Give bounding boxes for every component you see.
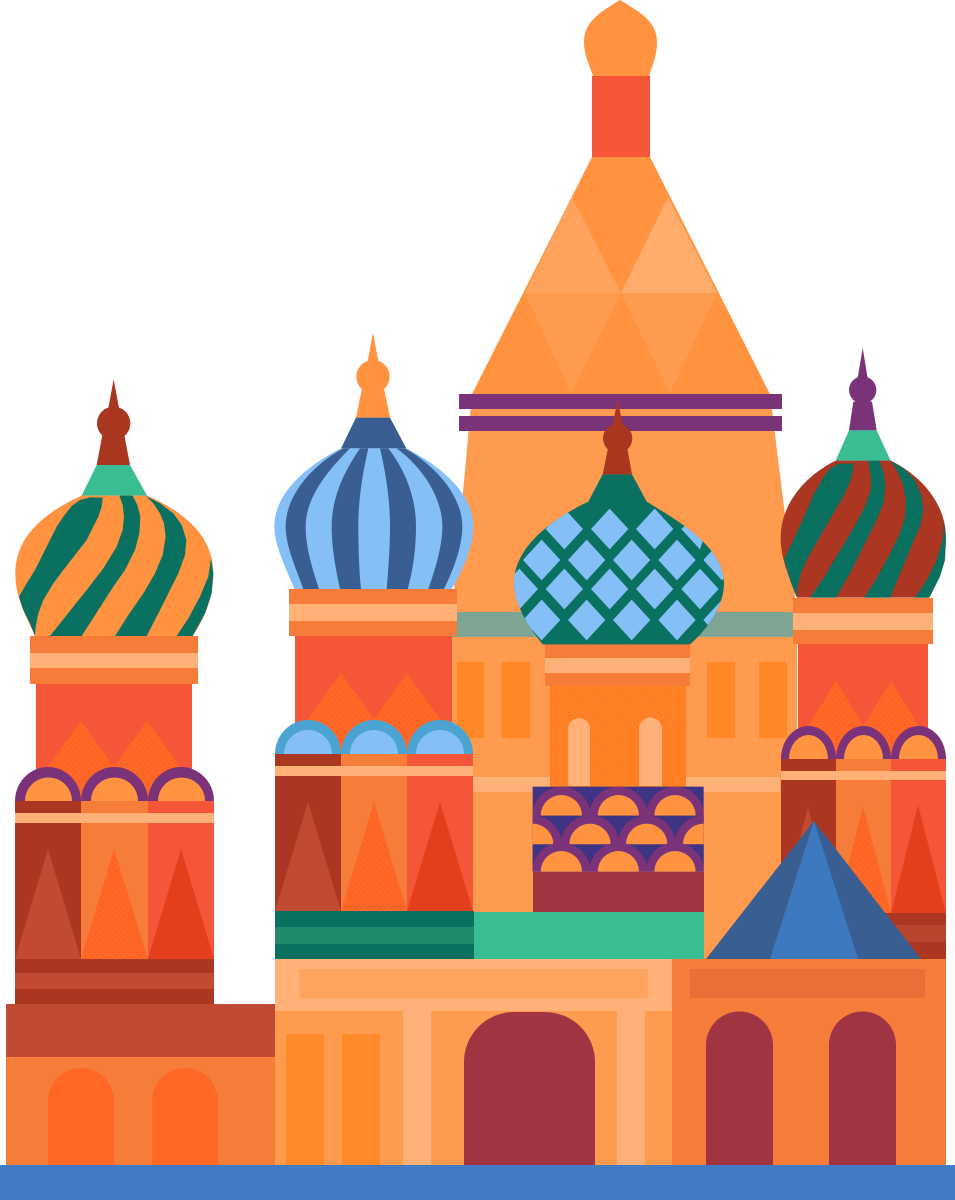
- red drum: [295, 636, 452, 726]
- dome stripes: [286, 448, 462, 589]
- drum triangle: [283, 673, 399, 754]
- dome body: [15, 496, 213, 636]
- column: [781, 759, 836, 913]
- collar: [82, 465, 147, 496]
- column: [341, 754, 407, 911]
- block wall: [275, 1011, 672, 1165]
- main tent tower: [452, 0, 797, 959]
- drum triangle: [89, 721, 205, 801]
- column: [275, 754, 341, 911]
- scale arcade: [532, 786, 704, 872]
- right tower: [781, 348, 946, 959]
- central lower section: [474, 644, 704, 959]
- triangle: [407, 802, 473, 911]
- right gate block: [672, 959, 946, 1165]
- lower band: [781, 925, 946, 942]
- triangle: [275, 802, 341, 911]
- central lattice dome: [514, 400, 724, 644]
- arched window: [48, 1068, 114, 1165]
- tent facet: [525, 197, 621, 293]
- blue tower: [274, 333, 474, 959]
- base band stripe: [15, 973, 214, 989]
- door: [829, 1011, 896, 1165]
- arched window: [639, 718, 662, 786]
- tower cap: [545, 644, 690, 686]
- drum triangle: [23, 721, 139, 801]
- drum triangle: [788, 681, 884, 759]
- blue dome: [274, 333, 473, 589]
- spire: [849, 348, 877, 430]
- maroon base: [533, 872, 704, 913]
- block wall: [672, 959, 946, 1165]
- arch inner: [789, 735, 938, 759]
- wing wall: [6, 1057, 275, 1165]
- triangle: [341, 802, 407, 911]
- pyramid sides: [706, 821, 921, 959]
- red drum: [798, 644, 928, 732]
- green base: [474, 912, 704, 959]
- purple band: [459, 394, 782, 409]
- spire: [603, 399, 632, 474]
- tent facet: [525, 293, 621, 393]
- center gate block: [275, 959, 672, 1165]
- central door: [464, 1012, 595, 1165]
- dotted tower: [550, 686, 686, 787]
- column: [15, 801, 81, 959]
- pyramid center: [770, 821, 858, 959]
- arch outer: [781, 726, 946, 759]
- right dome: [781, 348, 946, 598]
- pillar: [403, 1011, 431, 1165]
- light band: [275, 766, 473, 776]
- right cap: [793, 598, 933, 644]
- pillar: [617, 1011, 645, 1165]
- green base: [275, 911, 474, 959]
- left dome: [15, 379, 213, 636]
- tent spire bulb: [584, 0, 657, 76]
- window: [457, 662, 484, 738]
- purple band: [459, 416, 782, 431]
- window: [759, 662, 787, 738]
- tent roof: [472, 157, 770, 394]
- arch outer: [15, 767, 214, 801]
- panel: [690, 969, 925, 998]
- green base stripe: [275, 927, 474, 944]
- drum triangle: [349, 673, 465, 754]
- column: [81, 801, 148, 959]
- wing roof: [6, 1004, 275, 1057]
- triangle: [836, 806, 891, 913]
- dome: [514, 474, 724, 644]
- ground strip: [0, 1165, 955, 1200]
- column: [148, 801, 214, 959]
- entablature: [275, 959, 672, 1011]
- dome body: [781, 461, 946, 598]
- spire: [97, 379, 130, 465]
- teal band: [452, 612, 797, 637]
- blue tower cap: [289, 589, 457, 636]
- cap stripe: [545, 658, 690, 673]
- window: [502, 662, 530, 738]
- arched window: [152, 1068, 218, 1165]
- arch inner: [284, 730, 464, 754]
- arch inner: [25, 778, 205, 801]
- cap stripe: [289, 604, 457, 621]
- triangle: [891, 805, 946, 913]
- tower body: [452, 394, 797, 959]
- collar: [341, 418, 406, 448]
- left tower: [15, 379, 214, 1004]
- dome body: [274, 448, 473, 589]
- cap stripe: [30, 653, 198, 668]
- diamonds: [514, 508, 724, 640]
- dome stripes: [784, 461, 946, 598]
- arched window: [568, 718, 590, 786]
- entablature panel: [299, 969, 648, 998]
- light band: [15, 813, 214, 823]
- drum triangle: [843, 681, 939, 759]
- light band: [781, 771, 946, 780]
- blue pyramid: [706, 821, 921, 959]
- window: [286, 1034, 324, 1165]
- column: [407, 754, 473, 911]
- door: [706, 1011, 773, 1165]
- window: [342, 1034, 380, 1165]
- dome stripes: [19, 496, 213, 636]
- base band: [15, 959, 214, 1004]
- lower left wing: [6, 1004, 275, 1165]
- spire: [356, 333, 390, 418]
- triangle: [148, 849, 214, 959]
- triangle: [81, 849, 148, 959]
- left tower cap: [30, 636, 198, 684]
- right cap stripe: [793, 613, 933, 630]
- column: [836, 759, 891, 913]
- column: [891, 759, 946, 913]
- arch outer: [275, 720, 473, 754]
- triangle: [781, 807, 836, 913]
- tent facet: [621, 293, 717, 393]
- window: [707, 662, 735, 738]
- light band: [473, 777, 780, 792]
- collar: [836, 430, 891, 461]
- tent spire neck: [592, 76, 650, 157]
- lower bands: [781, 913, 946, 959]
- triangle: [15, 849, 81, 959]
- red drum: [36, 684, 192, 772]
- tent facet: [621, 197, 717, 293]
